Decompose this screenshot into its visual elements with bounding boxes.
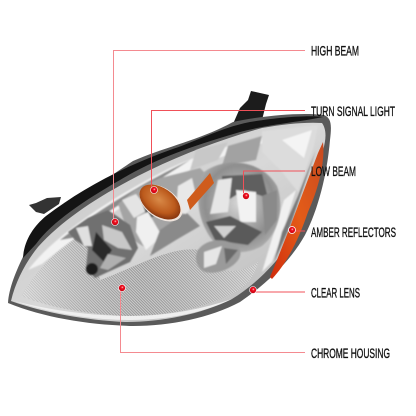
marker dot bbox=[118, 284, 126, 292]
clear lens bbox=[14, 226, 258, 320]
callout: turn signal light bbox=[150, 103, 395, 194]
amber side reflector bbox=[270, 142, 323, 279]
mounting bracket: left bbox=[29, 197, 61, 214]
marker dot bbox=[150, 186, 158, 194]
marker dot bbox=[288, 226, 296, 234]
low beam reflector bbox=[196, 163, 280, 273]
chrome body bbox=[11, 123, 326, 322]
turn signal lens bbox=[133, 177, 189, 229]
leader line bbox=[152, 110, 305, 190]
headlight assembly bbox=[8, 91, 331, 326]
leader line bbox=[244, 171, 305, 195]
interior chrome details bbox=[28, 125, 318, 272]
leader line bbox=[253, 291, 305, 293]
mounting bracket: top bbox=[233, 91, 269, 124]
marker dot bbox=[112, 218, 118, 226]
leader line bbox=[292, 230, 305, 232]
callout: high beam bbox=[112, 42, 359, 226]
callout: amber reflectors bbox=[288, 224, 396, 240]
leader line bbox=[120, 288, 305, 352]
black upper trim bbox=[23, 116, 323, 258]
leader line bbox=[114, 50, 305, 222]
label: HIGH BEAM bbox=[311, 42, 359, 58]
amber side strip bbox=[187, 173, 214, 210]
label: LOW BEAM bbox=[311, 163, 356, 179]
lamp outer frame bbox=[8, 114, 331, 326]
callout: chrome housing bbox=[118, 284, 390, 361]
marker dot bbox=[250, 286, 256, 294]
callout: clear lens bbox=[250, 284, 360, 300]
lower lens rim bbox=[14, 299, 232, 320]
label: CLEAR LENS bbox=[311, 284, 360, 300]
marker dot bbox=[242, 192, 250, 200]
high beam projector bbox=[68, 210, 138, 278]
callout: low beam bbox=[242, 163, 356, 200]
